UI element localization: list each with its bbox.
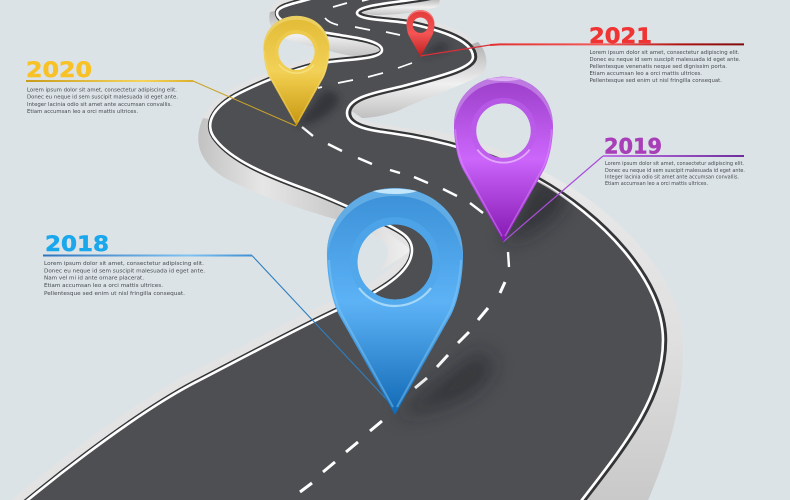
text 2021: Etiam accumsan leo a orci mattis ultrices. bbox=[590, 71, 702, 77]
text 2019: Integer lacinia odio sit amet ante accumsan convallis. bbox=[605, 174, 739, 180]
text 2020: Lorem ipsum dolor sit amet, consectetur adipiscing elit. bbox=[27, 88, 177, 94]
leader line 2018 bbox=[43, 256, 390, 403]
year 2018: 2018 bbox=[45, 232, 109, 256]
centre dashes: middle bbox=[302, 127, 509, 267]
text 2018 bbox=[44, 261, 205, 297]
road wall: large left bend bbox=[198, 118, 412, 285]
leader line 2019 bbox=[503, 156, 744, 242]
road wall: right outer edge bbox=[540, 170, 683, 500]
block 2018 bbox=[44, 232, 205, 297]
text 2021: Donec eu neque id sem suscipit malesuada id eget ante. bbox=[590, 57, 741, 63]
text 2019: Donec eu neque id sem suscipit malesuada id eget ante. bbox=[605, 168, 745, 174]
pin: 2018 blue bbox=[327, 188, 463, 415]
text 2021 bbox=[590, 50, 741, 84]
block 2019 bbox=[604, 134, 745, 187]
leader line 2020 bbox=[26, 81, 296, 126]
leader line 2021 bbox=[420, 44, 744, 56]
year 2020: 2020 bbox=[26, 58, 92, 82]
text 2021: Pellentesque venenatis neque sed dignissim porta. bbox=[590, 64, 727, 70]
pin: 2019 purple bbox=[454, 77, 553, 242]
text 2020: Integer lacinia odio sit amet ante accumsan convallis. bbox=[27, 102, 172, 108]
block 2021 bbox=[589, 24, 741, 84]
text 2020: Etiam accumsan leo a orci mattis ultrices. bbox=[27, 109, 138, 115]
block 2020 bbox=[26, 58, 178, 115]
pin shadows bbox=[296, 42, 565, 415]
road wall: top left bend bbox=[269, 10, 386, 57]
text 2018: Pellentesque sed enim ut nisl fringilla consequat. bbox=[44, 291, 185, 297]
text 2020: Donec eu neque id sem suscipit malesuada id eget ante. bbox=[27, 95, 178, 101]
text 2020 bbox=[27, 88, 178, 115]
text 2018: Lorem ipsum dolor sit amet, consectetur adipiscing elit. bbox=[44, 261, 204, 267]
text 2018: Nam vel mi id ante ornare placerat. bbox=[44, 276, 144, 282]
pin: 2020 yellow bbox=[264, 16, 329, 126]
text 2019 bbox=[605, 161, 745, 187]
text 2019: Lorem ipsum dolor sit amet, consectetur adipiscing elit. bbox=[605, 161, 744, 167]
text 2018: Etiam accumsan leo a orci mattis ultrices. bbox=[44, 283, 163, 289]
text 2018: Donec eu neque id sem suscipit malesuada id eget ante. bbox=[44, 268, 205, 274]
centre dashes: far bbox=[318, 0, 412, 88]
centre dashes: near bbox=[300, 282, 505, 492]
year 2021: 2021 bbox=[589, 24, 652, 48]
text 2021: Lorem ipsum dolor sit amet, consectetur adipiscing elit. bbox=[590, 50, 740, 56]
text 2019: Etiam accumsan leo a orci mattis ultrices. bbox=[605, 181, 708, 187]
year 2019: 2019 bbox=[604, 134, 662, 158]
road wall: top tail bbox=[357, 0, 440, 15]
road wall: right middle bend bbox=[350, 42, 487, 118]
text 2021: Pellentesque sed enim ut nisl fringilla consequat. bbox=[590, 78, 722, 84]
pin: 2021 red bbox=[407, 10, 434, 56]
